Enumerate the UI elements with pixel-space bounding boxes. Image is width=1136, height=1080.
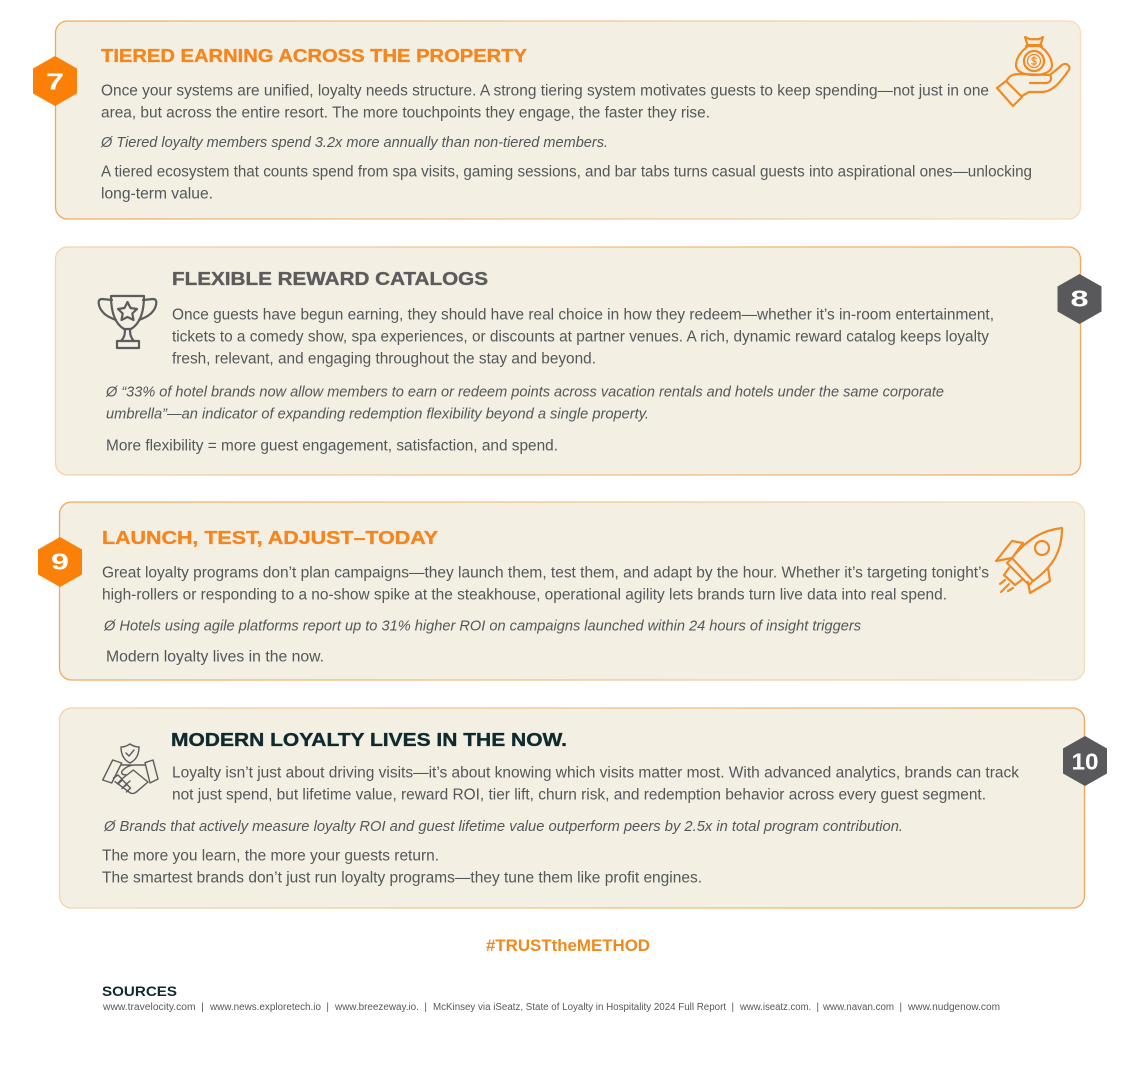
text block: launch intro: Great loyalty programs don’t plan campaigns—they launch them, test them, and adapt by the hour. Whether it’s targeting tonight’s xyxy=(102,564,989,581)
icon: money bag in hand xyxy=(997,37,1069,106)
statistic: tiered members: Ø Tiered loyalty members spend 3.2x more annually than non-tiered members. xyxy=(100,134,608,151)
badge: 8: 8 xyxy=(1070,286,1089,312)
text block: rewards intro: Once guests have begun earning, they should have real choice in how they redeem—whether it’s in-room entertainment, xyxy=(172,306,994,323)
text block: rewards intro: fresh, relevant, and engaging throughout the stay and beyond. xyxy=(172,350,596,367)
text block: tiered intro: Once your systems are unified, loyalty needs structure. A strong tiering system motivates guests to keep spending—not just in one xyxy=(101,82,989,99)
panel 8: flexible rewards xyxy=(56,247,1080,475)
sources block xyxy=(102,984,1000,1013)
heading: tiered earning: TIERED EARNING ACROSS THE PROPERTY xyxy=(101,45,528,66)
text block: tiered intro xyxy=(101,82,989,121)
panel 7: tiered earning xyxy=(56,21,1080,219)
icon: trophy xyxy=(99,296,156,348)
badge: 7 xyxy=(33,56,77,106)
heading: flexible rewards: FLEXIBLE REWARD CATALOGS xyxy=(172,268,488,289)
badge: 9 xyxy=(38,537,82,587)
text block: tiered ecosystem: long-term value. xyxy=(101,185,213,202)
hashtag: #TRUSTtheMETHOD xyxy=(486,937,650,955)
badge: 7: 7 xyxy=(46,68,64,94)
text block: tiered ecosystem xyxy=(101,163,1032,202)
sources heading: SOURCES xyxy=(102,984,177,999)
text block: launch intro xyxy=(102,564,989,603)
badge: 10 xyxy=(1063,736,1107,786)
sources list: www.news.exploretech.io | xyxy=(209,1002,329,1013)
statistic: loyalty ROI: Ø Brands that actively measure loyalty ROI and guest lifetime value outperform peers by 2.5x in total program contribution. xyxy=(103,818,903,835)
panel 9: launch, test, adjust xyxy=(60,502,1084,680)
badge: 9: 9 xyxy=(51,548,69,574)
text block: launch intro: high-rollers or responding to a no-show spike at the steakhouse, operational agility lets brands turn live data into real spend. xyxy=(102,586,947,603)
icon: rocket xyxy=(996,528,1062,593)
statistic: hotel brands: umbrella”—an indicator of expanding redemption flexibility beyond a single property. xyxy=(106,405,649,422)
statistic: hotel brands: Ø “33% of hotel brands now allow members to earn or redeem points across vacation rentals and hotels under the same corporate xyxy=(105,383,944,400)
text block: closing: The more you learn, the more your guests return. xyxy=(102,847,439,864)
sources list: www.navan.com | xyxy=(822,1002,902,1013)
icon: handshake with shield xyxy=(103,744,158,793)
sources list: www.breezeway.io. | xyxy=(334,1002,427,1013)
sources list: www.travelocity.com | xyxy=(102,1002,204,1013)
text block: tiered intro: area, but across the entire resort. The more touchpoints they engage, the faster they rise. xyxy=(101,104,710,121)
text block: modern loyalty: Modern loyalty lives in the now. xyxy=(106,648,324,665)
badge: 8 xyxy=(1058,274,1102,324)
text block: closing: The smartest brands don’t just run loyalty programs—they tune them like profit engines. xyxy=(102,869,702,886)
statistic: agile platforms: Ø Hotels using agile platforms report up to 31% higher ROI on campaigns launched within 24 hours of insight triggers xyxy=(103,617,861,634)
statistic: hotel brands xyxy=(105,383,944,422)
sources list: www.nudgenow.com xyxy=(907,1002,1000,1013)
text block: rewards intro xyxy=(172,306,994,367)
heading: launch: LAUNCH, TEST, ADJUST–TODAY xyxy=(102,527,439,548)
panel 10: modern loyalty xyxy=(60,708,1084,908)
text block: analytics intro xyxy=(172,764,1019,803)
sources list: www.iseatz.com. | xyxy=(739,1002,819,1013)
text block: closing xyxy=(102,847,702,886)
text block: rewards intro: tickets to a comedy show, spa experiences, or discounts at partner venues. A rich, dynamic reward catalog keeps loyalty xyxy=(172,328,989,345)
heading: modern loyalty: MODERN LOYALTY LIVES IN THE NOW. xyxy=(171,729,567,750)
text block: analytics intro: not just spend, but lifetime value, reward ROI, tier lift, churn risk, and redemption behavior across every guest segment. xyxy=(172,786,986,803)
text block: tiered ecosystem: A tiered ecosystem that counts spend from spa visits, gaming sessions, and bar tabs turns casual guests into aspirational ones—unlocking xyxy=(101,163,1032,180)
badge: 10: 10 xyxy=(1072,748,1098,774)
sources list: McKinsey via iSeatz, State of Loyalty in Hospitality 2024 Full Report | xyxy=(433,1002,734,1013)
sources list xyxy=(102,1002,1000,1013)
text block: analytics intro: Loyalty isn’t just about driving visits—it’s about knowing which visits matter most. With advanced analytics, brands can track xyxy=(172,764,1019,781)
text block: flexibility: More flexibility = more guest engagement, satisfaction, and spend. xyxy=(106,437,558,454)
